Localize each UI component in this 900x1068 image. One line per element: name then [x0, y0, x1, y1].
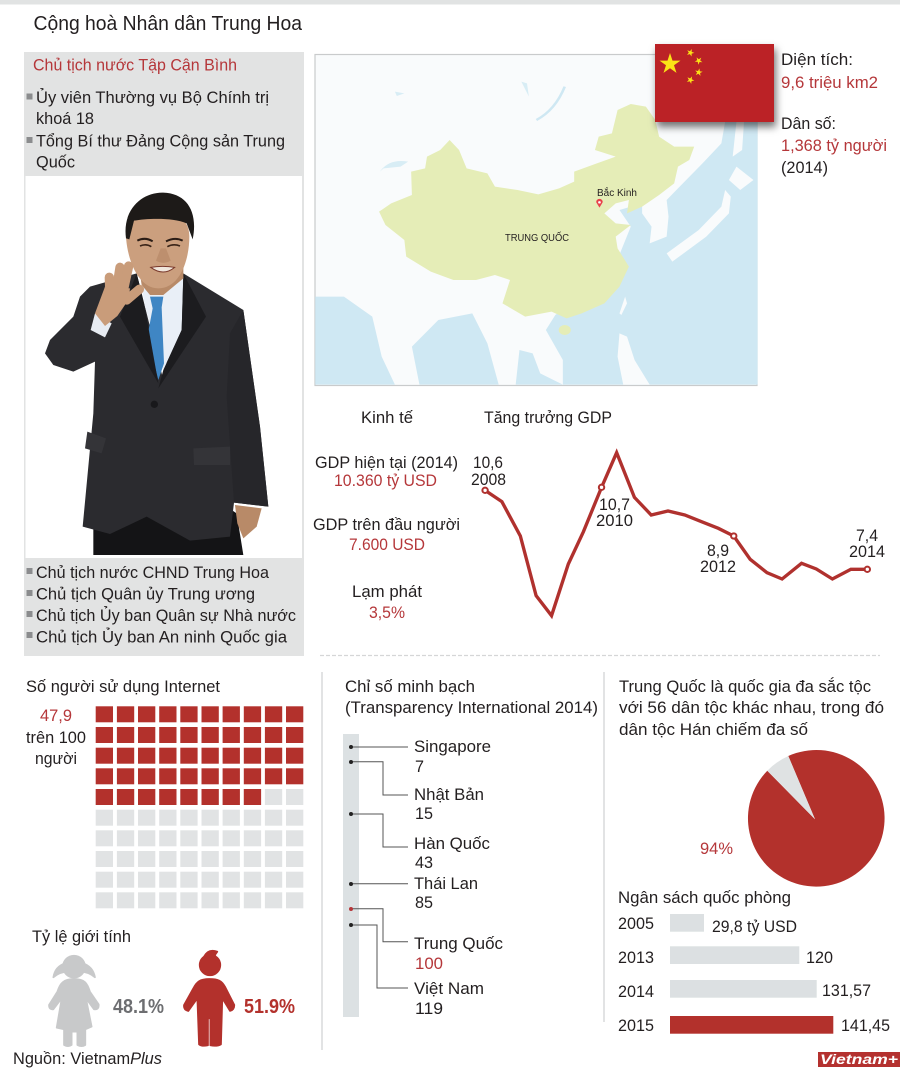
panel: internet users: [26, 678, 303, 908]
state positions: [26, 564, 296, 646]
panel: ethnic groups: Trung Quốc là quốc gia đa sắc tộc: [619, 677, 871, 696]
country facts: 1,368 tỷ người: [781, 137, 887, 155]
economy figures: Kinh tế: [361, 409, 413, 427]
icon: China flag: [655, 44, 774, 122]
bar: 2013: [618, 946, 833, 967]
line chart: GDP growth: 2014: [849, 543, 885, 561]
bar: 2014: 131,57: [822, 982, 871, 1000]
party positions: Tổng Bí thư Đảng Cộng sản Trung: [36, 132, 285, 150]
party positions: [26, 88, 285, 172]
economy figures: 3,5%: [369, 604, 405, 622]
panel: ethnic groups: 94%: [700, 840, 733, 858]
panel: gender ratio: 51.9%: [244, 996, 295, 1018]
state positions: Chủ tịch Ủy ban An ninh Quốc gia: [36, 628, 288, 646]
panel: defence budget: [618, 889, 890, 1035]
panel: gender ratio: 48.1%: [113, 996, 164, 1018]
bar: 2014: 2014: [618, 983, 654, 1001]
country facts: [781, 51, 887, 177]
economy figures: 7.600 USD: [349, 536, 425, 554]
leader name: Chủ tịch nước Tập Cận Bình: [33, 56, 237, 74]
bar: 2014: [618, 980, 871, 1001]
pie chart: [748, 750, 885, 887]
line chart: GDP growth: 10,7: [599, 496, 630, 514]
panel: leader profile: [24, 52, 304, 656]
line chart: GDP growth: [471, 409, 885, 616]
icon: boy: [184, 951, 234, 1046]
country facts: (2014): [781, 159, 828, 177]
panel: gender ratio: [32, 928, 295, 1046]
panel: transparency index: Trung Quốc: [414, 935, 503, 953]
line chart: GDP growth: 8,9: [707, 542, 729, 560]
label: Beijing: Bắc Kinh: [597, 186, 637, 199]
panel: internet users: Số người sử dụng Internet: [26, 678, 220, 696]
bar: 2005: 2005: [618, 915, 654, 933]
panel: ethnic groups: [619, 677, 885, 887]
economy figures: GDP hiện tại (2014): [315, 454, 458, 472]
party positions: khoá 18: [36, 110, 94, 128]
panel: internet users: 47,9: [40, 707, 72, 725]
line chart: GDP growth: 10,6: [473, 454, 503, 472]
economy figures: GDP trên đầu người: [313, 516, 460, 534]
panel: transparency index: 85: [415, 894, 433, 912]
source: Nguồn: VietnamPlus: [13, 1050, 162, 1068]
bar: 2005: [618, 914, 797, 936]
line chart: GDP growth: 2008: [471, 471, 506, 489]
line chart: GDP growth: Tăng trưởng GDP: [484, 409, 612, 427]
title: Cộng hoà Nhân dân Trung Hoa: [34, 13, 303, 35]
panel: ethnic groups: với 56 dân tộc khác nhau, trong đó: [619, 699, 884, 717]
label: China: TRUNG QUỐC: [505, 230, 569, 244]
bar: 2005: 29,8 tỷ USD: [712, 918, 797, 936]
bar: 2015: 141,45: [841, 1017, 890, 1035]
panel: transparency index: 43: [415, 854, 433, 872]
country facts: 9,6 triệu km2: [781, 74, 878, 92]
economy figures: 10.360 tỷ USD: [334, 472, 437, 490]
logo: Vietnam+: Vietnam+: [820, 1051, 898, 1067]
panel: transparency index: Thái Lan: [414, 875, 478, 893]
bar: 2015: [618, 1016, 890, 1035]
map of China: [315, 54, 758, 386]
state positions: Chủ tịch Quân ủy Trung ương: [36, 586, 255, 604]
panel: transparency index: Hàn Quốc: [414, 835, 490, 853]
line chart: GDP growth: 7,4: [856, 527, 878, 545]
line chart: GDP growth: 2010: [596, 512, 633, 530]
panel: transparency index: 15: [415, 805, 433, 823]
panel: transparency index: (Transparency International 2014): [345, 699, 598, 717]
economy figures: [313, 409, 460, 622]
bar: 2013: 120: [806, 949, 833, 967]
state positions: Chủ tịch Ủy ban Quân sự Nhà nước: [36, 606, 296, 625]
panel: transparency index: Nhật Bản: [414, 786, 484, 804]
bar: 2015: 2015: [618, 1017, 654, 1035]
portrait figure: [45, 193, 268, 555]
panel: internet users: trên 100: [26, 729, 86, 747]
country facts: Dân số:: [781, 115, 836, 133]
state positions: Chủ tịch nước CHND Trung Hoa: [36, 564, 270, 582]
icon: girl: [49, 956, 99, 1046]
party positions: Quốc: [36, 154, 75, 172]
economy figures: Lạm phát: [352, 583, 422, 601]
waffle chart: [96, 706, 303, 908]
party positions: Ủy viên Thường vụ Bộ Chính trị: [36, 88, 269, 107]
country facts: Diện tích:: [781, 51, 853, 69]
panel: ethnic groups: dân tộc Hán chiếm đa số: [619, 721, 808, 739]
panel: transparency index: Singapore: [414, 738, 491, 756]
ranking scale: [343, 734, 408, 1017]
panel: transparency index: [343, 678, 598, 1018]
panel: transparency index: 7: [415, 758, 424, 776]
line chart: GDP growth: 2012: [700, 558, 736, 576]
panel: gender ratio: Tỷ lệ giới tính: [32, 928, 131, 946]
panel: internet users: người: [35, 750, 77, 768]
panel: transparency index: Việt Nam: [414, 980, 484, 998]
panel: defence budget: Ngân sách quốc phòng: [618, 889, 791, 907]
bar: 2013: 2013: [618, 949, 654, 967]
panel: transparency index: Chỉ số minh bạch: [345, 678, 475, 696]
panel: transparency index: 119: [415, 1000, 443, 1018]
Beijing pin: [596, 199, 603, 208]
panel: transparency index: 100: [415, 955, 443, 973]
